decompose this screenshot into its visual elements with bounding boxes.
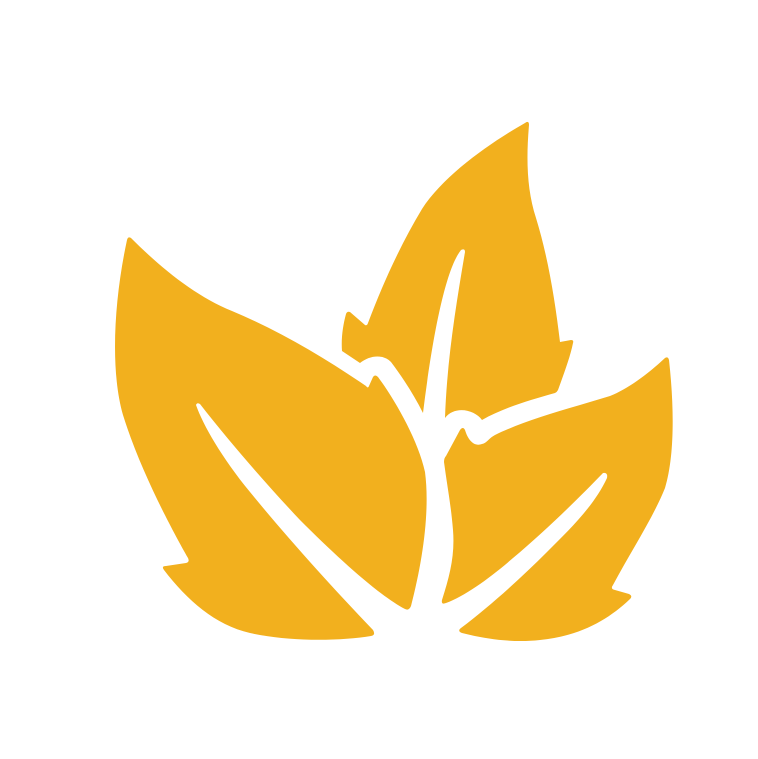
- right leaf: [442, 357, 673, 641]
- left leaf: [115, 237, 427, 640]
- top leaf: [342, 122, 573, 420]
